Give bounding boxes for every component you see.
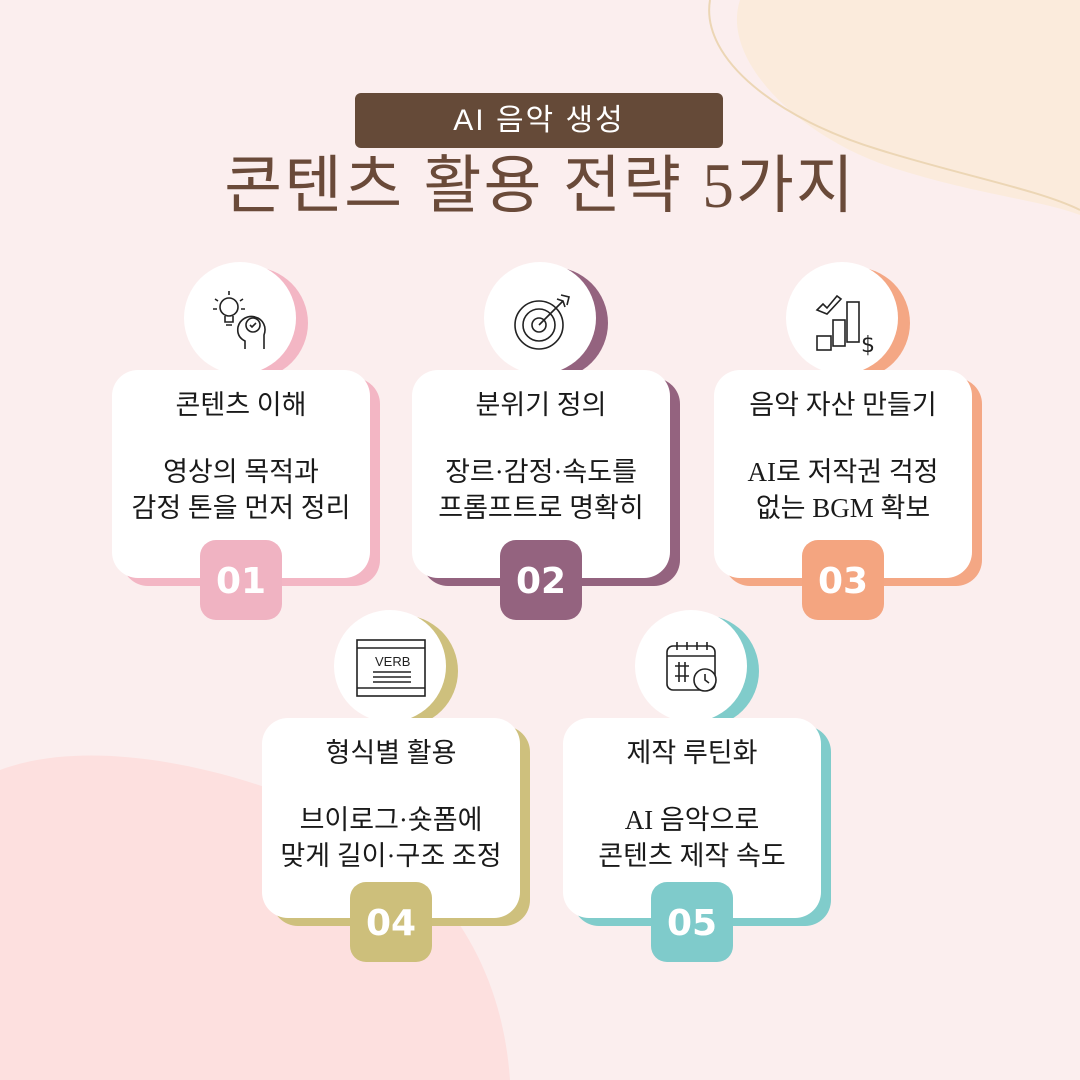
text: 브이로그·숏폼에 (300, 805, 482, 835)
heading: 음악 자산 만들기 (749, 390, 937, 420)
panel: card 3 (714, 262, 982, 620)
text: 영상의 목적과 (163, 457, 319, 487)
icon: target (514, 294, 570, 350)
icon: verb page (356, 639, 426, 697)
text: 콘텐츠 제작 속도 (598, 841, 786, 871)
text: AI 음악으로 (625, 805, 759, 835)
badge 02: 02 (516, 561, 566, 602)
badge 01 (200, 540, 282, 620)
heading: 형식별 활용 (326, 738, 456, 768)
panel: card 4 (262, 610, 530, 962)
heading: 콘텐츠 이해 (176, 390, 306, 420)
text: 감정 톤을 먼저 정리 (132, 493, 350, 523)
text (280, 805, 502, 871)
icon: growth: $ (861, 333, 875, 358)
icon: bulb head (213, 291, 266, 349)
main title: 콘텐츠 활용 전략 5가지 (224, 151, 856, 221)
panel: card 1 (112, 262, 380, 620)
title tag: AI 음악 생성 (453, 104, 625, 137)
text (747, 457, 939, 523)
badge 05 (651, 882, 733, 962)
text: 맞게 길이·구조 조정 (280, 841, 502, 871)
text: AI로 저작권 걱정 (747, 457, 939, 487)
text (598, 805, 786, 871)
icon: verb page: VERB (375, 654, 410, 669)
text (438, 457, 644, 523)
title tag (355, 93, 723, 148)
heading: 분위기 정의 (476, 390, 606, 420)
text: 프롬프트로 명확히 (438, 493, 644, 523)
panel: card 5 (563, 610, 831, 962)
panel: card 2 (412, 262, 680, 620)
badge 05: 05 (667, 903, 717, 944)
heading: 제작 루틴화 (627, 738, 757, 768)
badge 01: 01 (216, 561, 266, 602)
icon: calendar clock (666, 642, 717, 692)
badge 02 (500, 540, 582, 620)
badge 03: 03 (818, 561, 868, 602)
badge 04: 04 (366, 903, 416, 944)
text: 없는 BGM 확보 (756, 493, 930, 523)
icon: growth (816, 294, 875, 358)
text: 장르·감정·속도를 (445, 457, 637, 487)
text (132, 457, 350, 523)
badge 04 (350, 882, 432, 962)
badge 03 (802, 540, 884, 620)
